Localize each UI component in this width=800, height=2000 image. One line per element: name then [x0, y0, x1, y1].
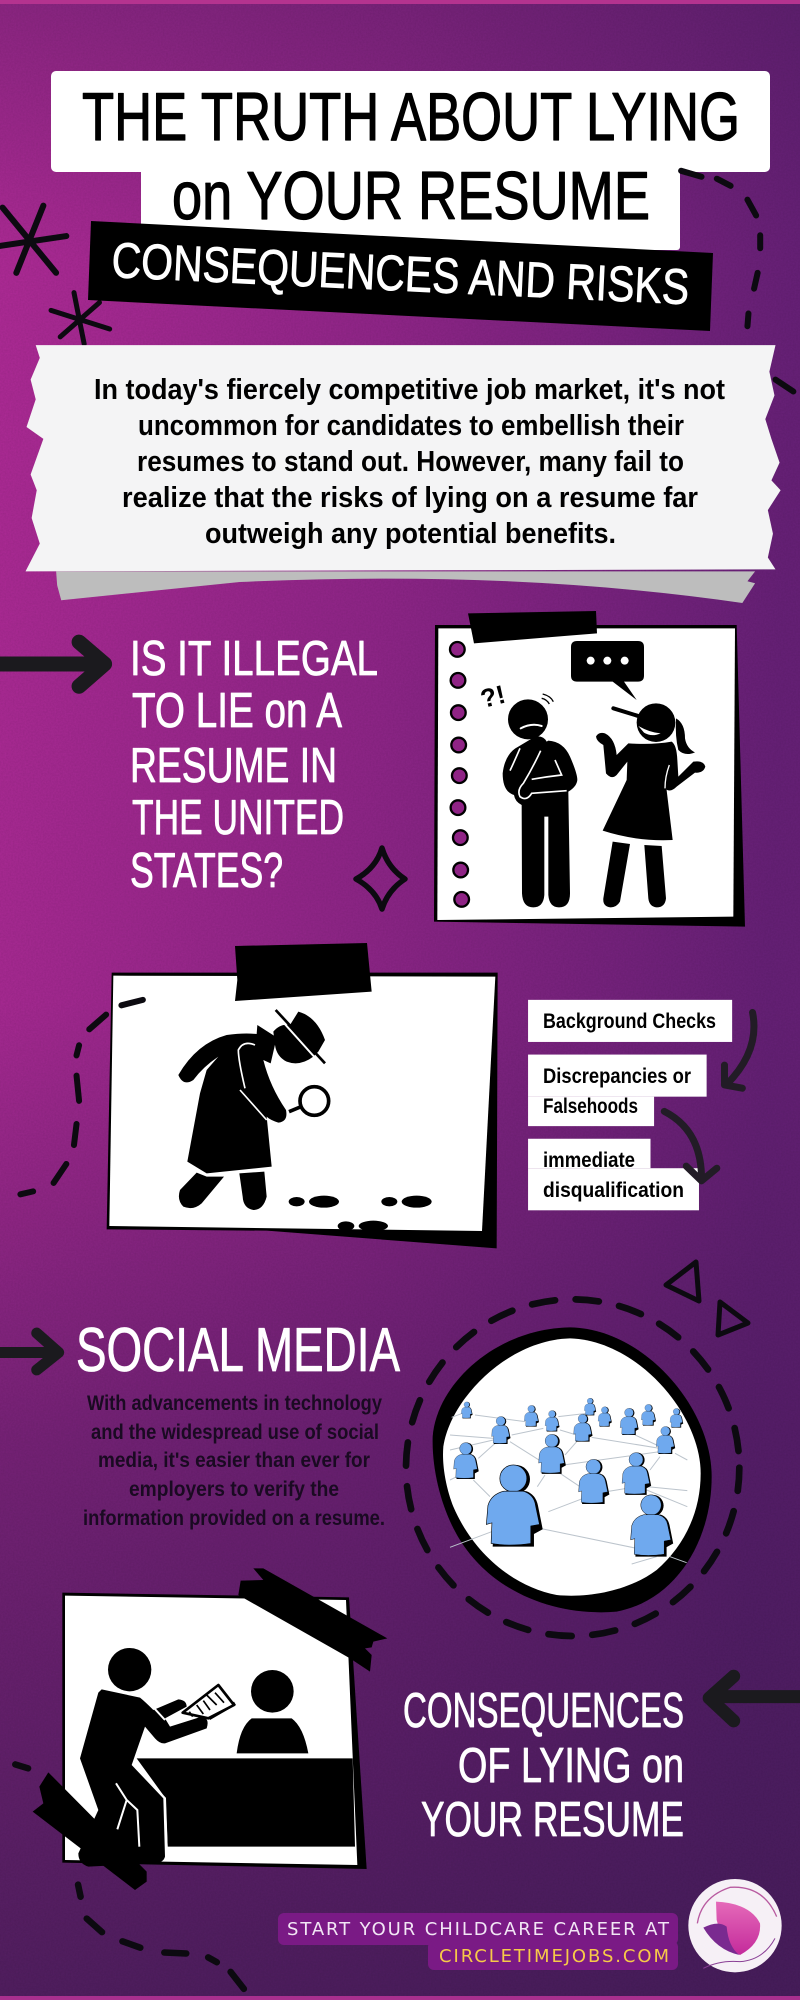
arrow: points to consequences heading [709, 1676, 800, 1721]
notebook holes [450, 642, 469, 907]
heading: is it illegal: TO LIE on A [132, 684, 342, 738]
labels: checks list: Falsehoods [543, 1095, 638, 1118]
man thinking [477, 679, 577, 907]
text block: social media: With advancements in technology [87, 1392, 382, 1415]
heading: is it illegal: IS IT ILLEGAL [130, 632, 378, 686]
panel: intro torn paper: realize that the risks of lying on a resume far [122, 482, 698, 514]
title: two white blocks with heading: on YOUR RESUME [172, 158, 650, 234]
people [454, 1398, 683, 1557]
network lines [450, 1412, 687, 1564]
blob [433, 1327, 712, 1612]
title: two white blocks with heading [51, 71, 770, 250]
card frame [107, 943, 498, 1248]
heading: consequences: OF LYING on [458, 1739, 684, 1793]
panel: intro torn paper: resumes to stand out. However, many fail to [137, 446, 684, 478]
card frame [62, 1593, 367, 1869]
panel: social network circle [406, 1299, 739, 1636]
dashes: bottom trail [15, 1764, 244, 1989]
card frame [434, 611, 745, 927]
icon: four-point sparkle [356, 848, 405, 909]
panel: intro torn paper [26, 345, 781, 603]
labels: checks list: Discrepancies or [543, 1065, 691, 1088]
labels: checks list: immediate [543, 1149, 635, 1172]
panel: intro torn paper: uncommon for candidates to embellish their [138, 410, 684, 442]
heading: is it illegal: RESUME IN [130, 739, 337, 793]
heading: consequences [403, 1684, 684, 1847]
text block: social media: information provided on a resume. [83, 1507, 385, 1530]
heading: is it illegal: THE UNITED [132, 791, 344, 845]
interviewer [237, 1670, 308, 1753]
speech bubble [571, 641, 644, 700]
labels: checks list: disqualification [543, 1179, 684, 1202]
labels: checks list: Background Checks [543, 1010, 716, 1033]
text block: social media: media, it's easier than ever for [98, 1449, 370, 1472]
woman with long nose [596, 703, 705, 907]
footer: call to action: CIRCLETIMEJOBS.COM [439, 1946, 669, 1967]
detective figure [178, 1010, 329, 1210]
panel: intro torn paper: In today's fiercely competitive job market, it's not [94, 374, 725, 406]
man thinking: ?! [477, 679, 508, 714]
decoration: asterisks and dashed line [0, 171, 793, 391]
arrows: curved between labels [664, 1012, 754, 1181]
subtitle banner: CONSEQUENCES AND RISKS [110, 232, 690, 315]
text block: social media [83, 1392, 385, 1530]
footer: call to action [278, 1913, 678, 1970]
heading: is it illegal: STATES? [130, 844, 283, 898]
arrow: points to illegal heading [0, 642, 105, 686]
logo [688, 1879, 782, 1972]
panel: note card with two figures [434, 611, 745, 927]
dashes: detective trail [20, 1000, 143, 1194]
heading: consequences: YOUR RESUME [421, 1793, 684, 1847]
triangles [666, 1262, 748, 1335]
panel: intro torn paper: outweigh any potential benefits. [205, 518, 616, 550]
candidate with resume [78, 1648, 236, 1867]
tape [33, 1568, 387, 1890]
dashed ring [406, 1299, 739, 1636]
heading: is it illegal [130, 632, 378, 898]
footprints [289, 1196, 432, 1231]
heading: social media: SOCIAL MEDIA [76, 1316, 400, 1385]
text block: social media: employers to verify the [129, 1478, 339, 1501]
desk [137, 1758, 355, 1847]
panel: detective card [107, 943, 498, 1248]
labels: checks list [528, 1000, 732, 1210]
text block: social media: and the widespread use of social [91, 1421, 379, 1444]
footer: call to action: START YOUR CHILDCARE CAREER AT [287, 1919, 670, 1940]
arrow: points to social media [0, 1333, 59, 1370]
panel: interview card [33, 1568, 387, 1890]
